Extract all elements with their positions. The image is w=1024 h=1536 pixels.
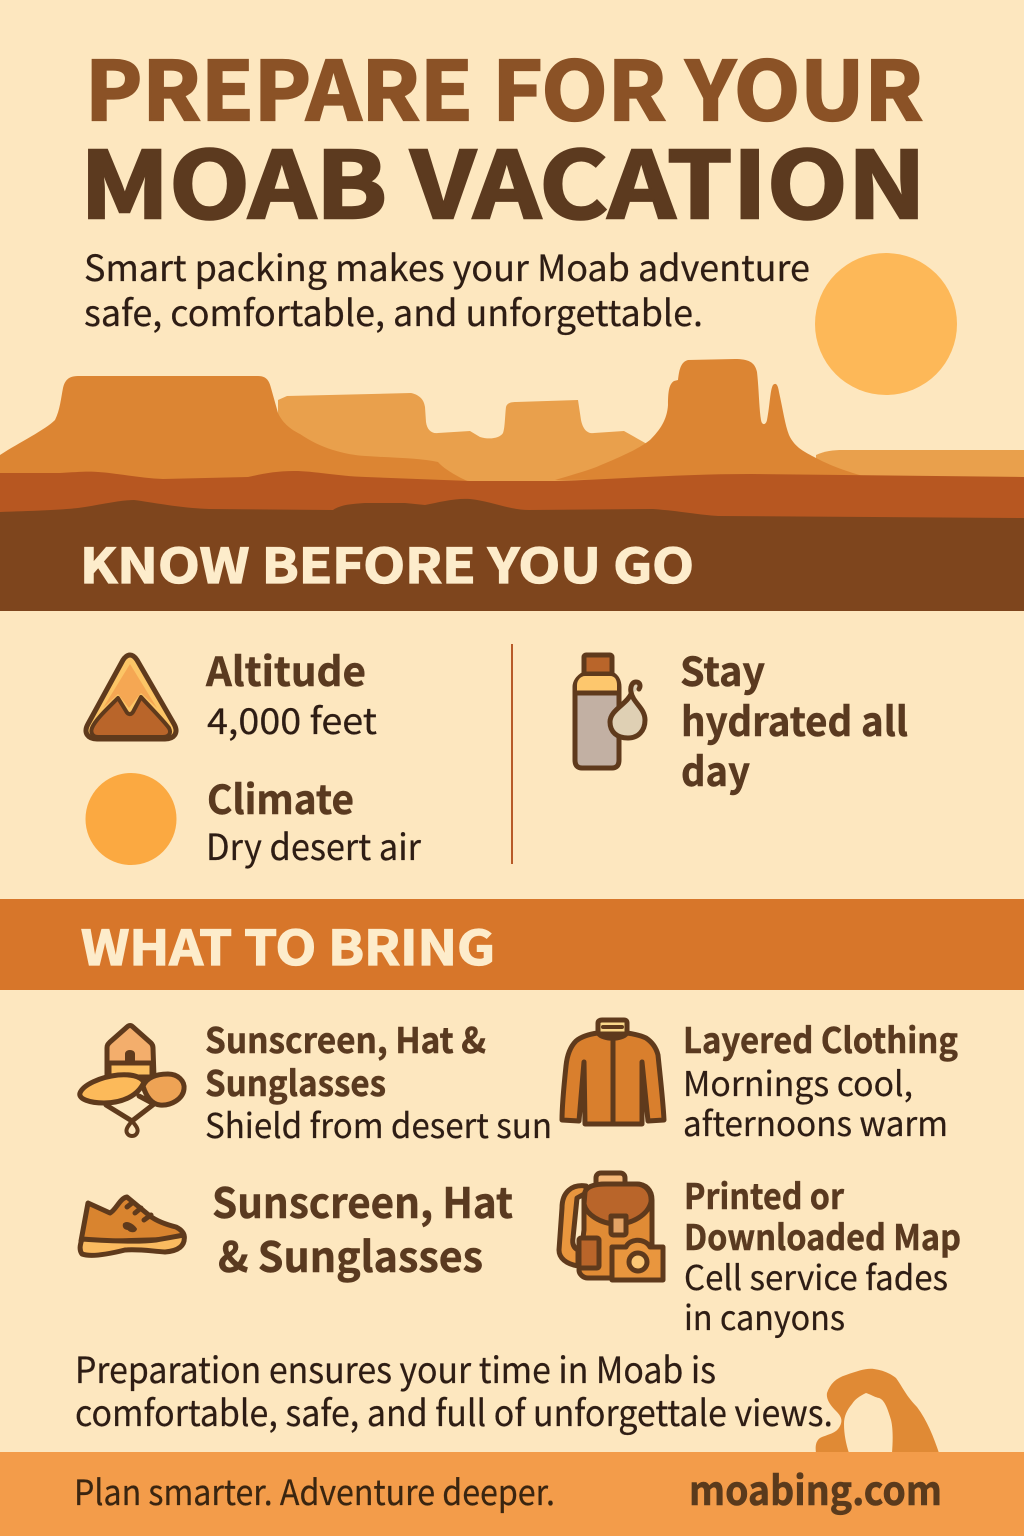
heading band: what to bring: WHAT TO BRING — [81, 909, 495, 979]
climate text — [206, 768, 422, 871]
climate text: Dry desert air — [206, 819, 422, 871]
subtitle — [84, 240, 810, 337]
hydration text: Stay — [680, 640, 765, 698]
footwear text: Sunscreen, Hat — [212, 1170, 513, 1231]
map text: Downloaded Map — [684, 1210, 961, 1261]
sun protection text: Shield from desert sun — [205, 1099, 552, 1148]
sun — [815, 253, 957, 395]
sun protection text — [205, 1013, 552, 1148]
title: MOAB VACATION — [80, 112, 926, 245]
hydration text: hydrated all — [681, 690, 908, 748]
icon: jacket — [562, 1020, 664, 1124]
sun protection text: Sunglasses — [205, 1056, 386, 1107]
subtitle: safe, comfortable, and unforgettable. — [84, 285, 703, 337]
footer band: Plan smarter. Adventure deeper. — [74, 1465, 555, 1516]
closing statement: comfortable, safe, and full of unforgettale views. — [75, 1385, 833, 1437]
clothing text: Layered Clothing — [683, 1013, 958, 1064]
hydration text: day — [681, 740, 750, 798]
sun protection text: Sunscreen, Hat & — [205, 1013, 486, 1064]
clothing text: Mornings cool, — [683, 1057, 913, 1106]
footwear text — [212, 1170, 513, 1285]
altitude text: Altitude — [205, 640, 366, 698]
icon: sun hat — [80, 1026, 184, 1136]
icon: sun climate — [86, 773, 176, 865]
icon: hiking shoe — [80, 1197, 184, 1255]
footwear text: & Sunglasses — [218, 1224, 483, 1285]
footer band — [0, 1452, 1024, 1536]
subtitle: Smart packing makes your Moab adventure — [84, 240, 810, 292]
map text — [684, 1169, 961, 1340]
hydration text — [680, 640, 908, 798]
clothing text: afternoons warm — [683, 1097, 948, 1146]
desert landscape — [0, 359, 1024, 611]
icon: water bottle — [575, 655, 645, 768]
title: PREPARE FOR YOUR — [85, 27, 923, 144]
clothing text — [683, 1013, 958, 1146]
closing statement — [75, 1342, 833, 1437]
climate text: Climate — [207, 768, 354, 826]
title — [80, 27, 926, 245]
heading: know before you go: KNOW BEFORE YOU GO — [80, 527, 694, 597]
heading band: what to bring — [0, 899, 1024, 990]
closing statement: Preparation ensures your time in Moab is — [75, 1342, 716, 1394]
icon: mountain — [86, 655, 176, 739]
map text: in canyons — [684, 1291, 845, 1340]
map text: Cell service fades — [684, 1251, 948, 1300]
altitude text — [205, 640, 377, 745]
map text: Printed or — [684, 1169, 845, 1220]
footer band: moabing.com — [689, 1459, 942, 1517]
icon: delicate arch — [816, 1369, 939, 1453]
altitude text: 4,000 feet — [207, 693, 377, 745]
icon: backpack and camera — [559, 1173, 663, 1280]
